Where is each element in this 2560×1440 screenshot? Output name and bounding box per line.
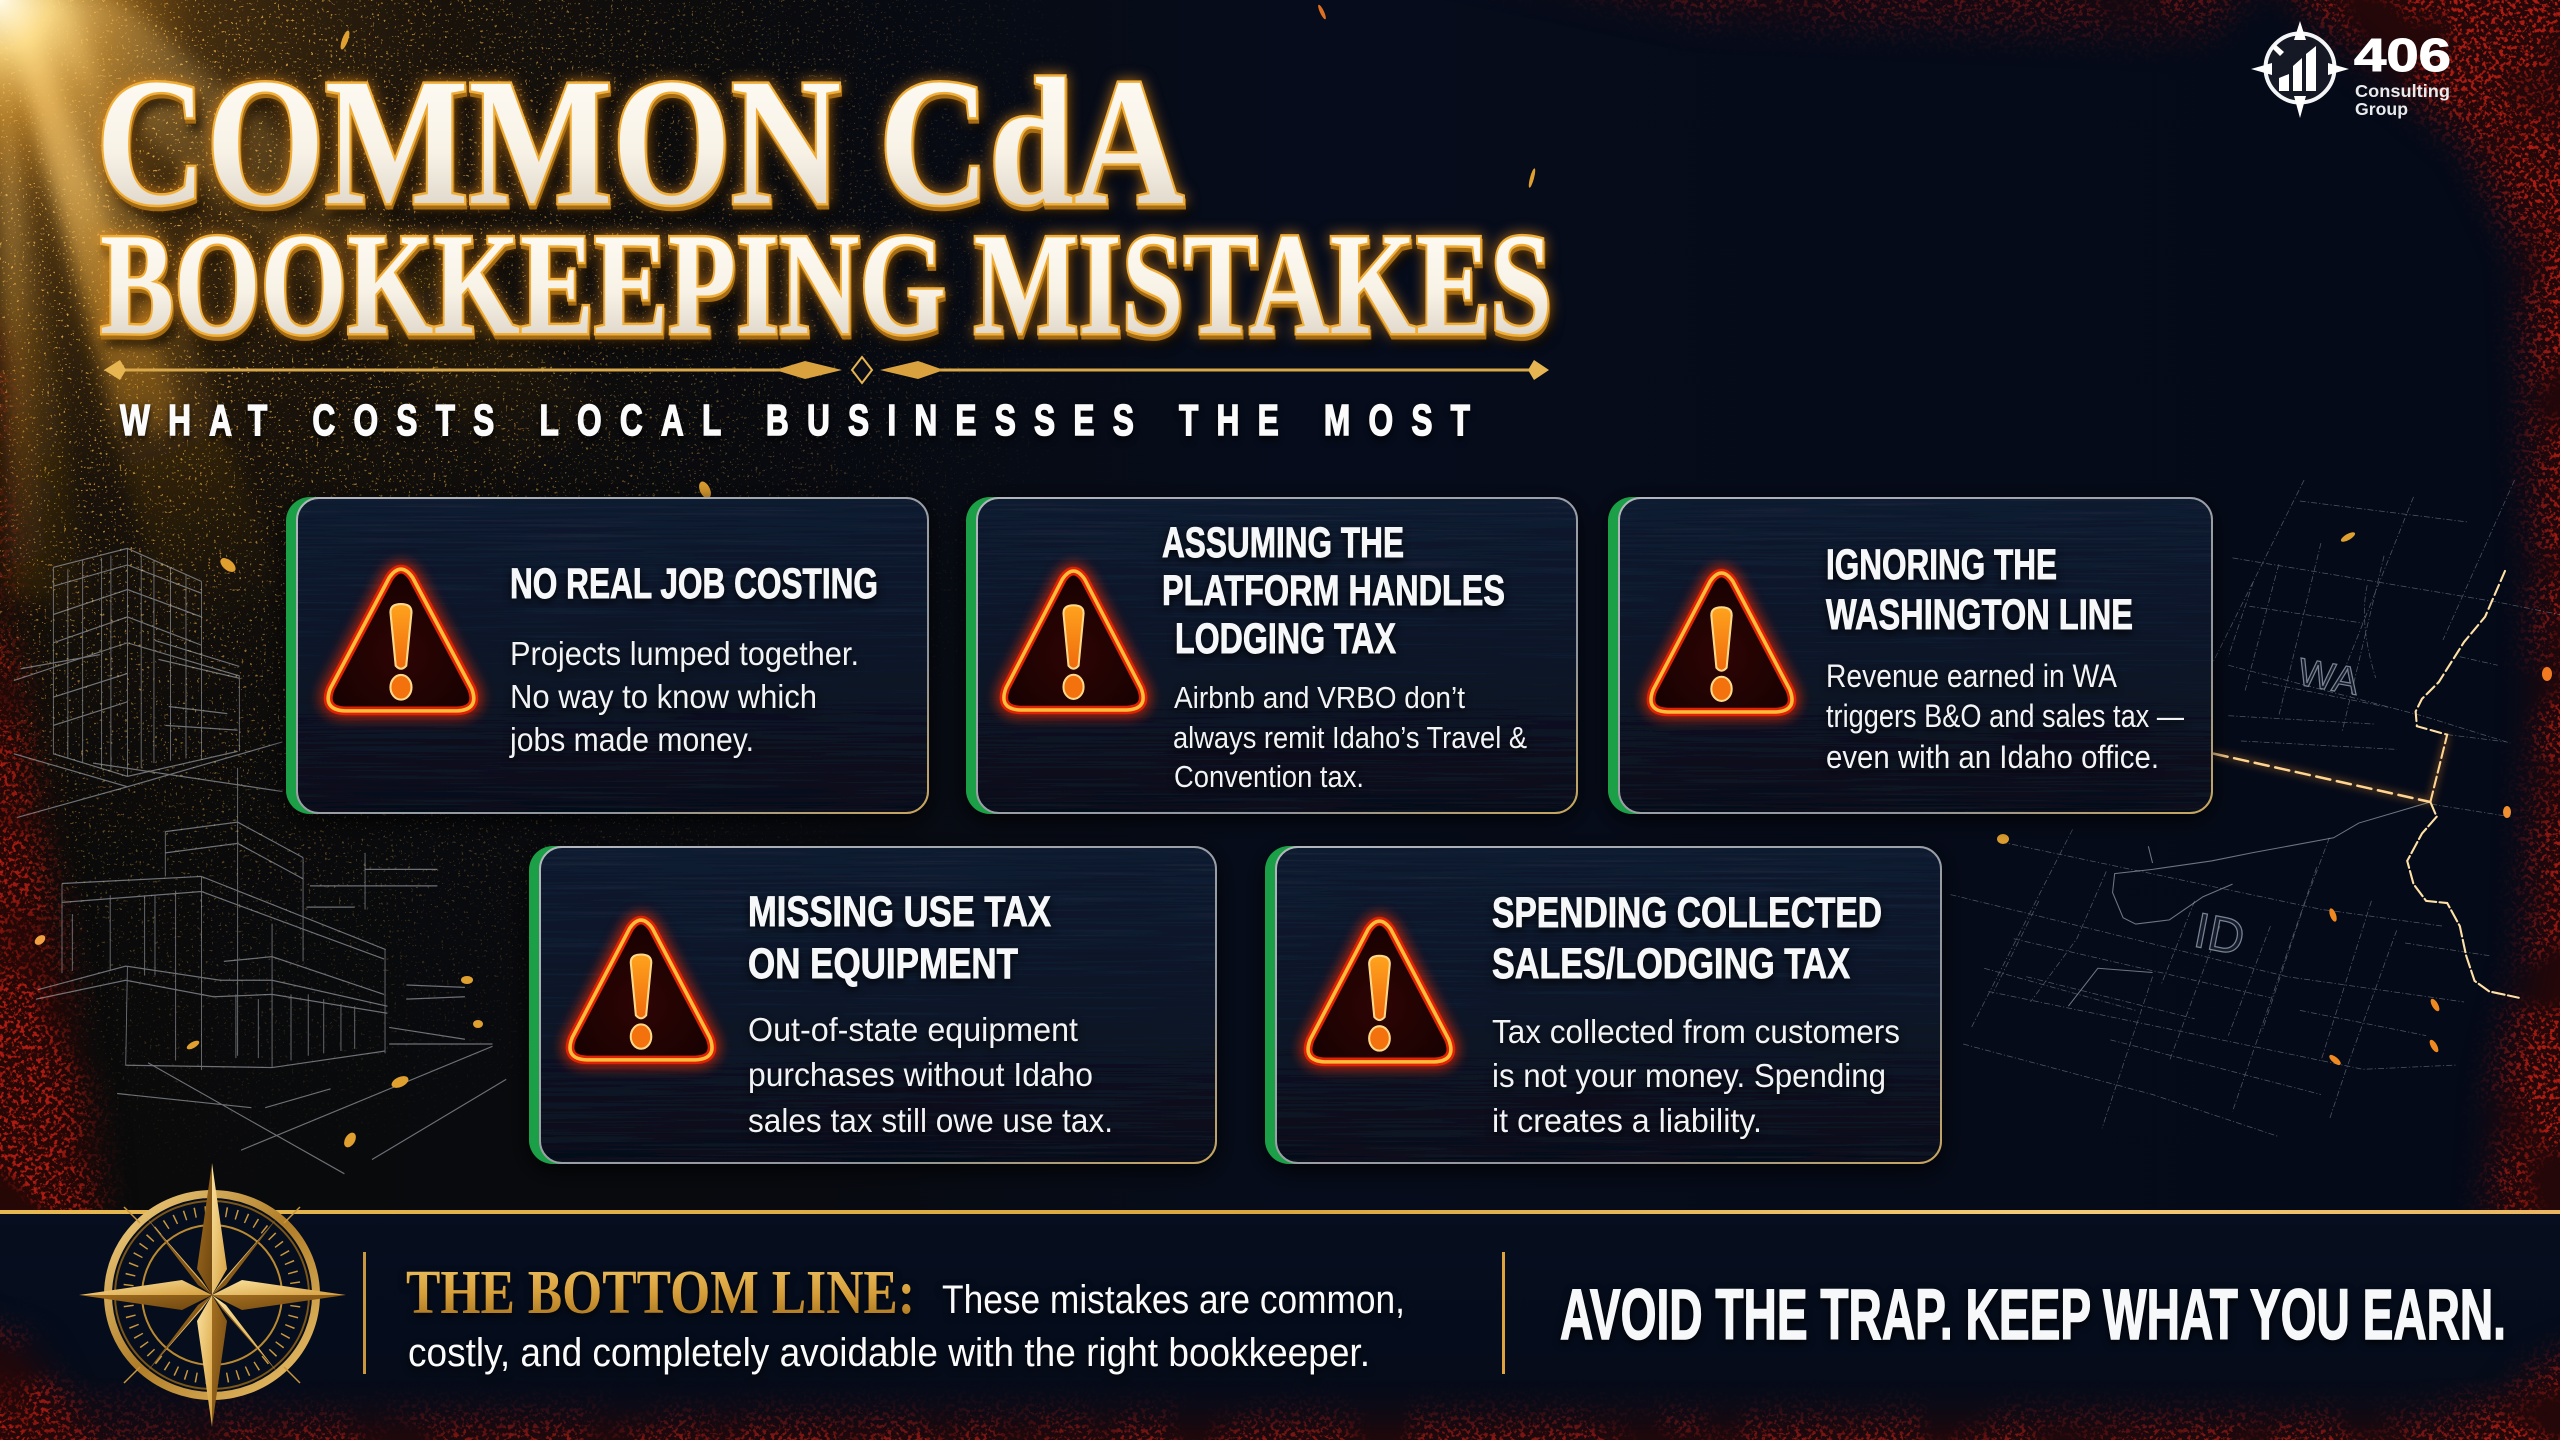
heading: SALES/LODGING TAX	[1492, 940, 1850, 988]
panel: assuming the platform handles lodging tax	[966, 497, 1577, 814]
icon: warning triangle	[328, 569, 474, 711]
description: No way to know which	[510, 678, 817, 715]
icon: compass with bar chart	[2251, 21, 2349, 118]
description	[1173, 680, 1527, 794]
logo: 406 Consulting Group	[2251, 21, 2451, 119]
heading	[748, 888, 1051, 988]
map grid lines	[1951, 480, 2560, 1137]
icon: warning triangle	[570, 920, 712, 1060]
description: Revenue earned in WA	[1826, 658, 2118, 694]
label: WA: WA	[2295, 651, 2362, 704]
card surface	[966, 497, 1577, 814]
label: ID: ID	[2190, 902, 2249, 966]
description: Projects lumped together.	[510, 635, 859, 672]
card surface	[286, 497, 928, 814]
description: is not your money. Spending	[1492, 1057, 1886, 1094]
heading: ASSUMING THE	[1162, 519, 1404, 567]
bottom line text one: These mistakes are common,	[942, 1278, 1405, 1322]
heading: PLATFORM HANDLES	[1162, 567, 1505, 615]
icon: warning triangle	[1004, 571, 1143, 710]
heading: NO REAL JOB COSTING	[510, 560, 878, 608]
panel: missing use tax on equipment	[529, 846, 1216, 1164]
title	[96, 42, 1552, 365]
bottom band fill	[0, 1212, 2560, 1440]
subtitle: WHAT COSTS LOCAL BUSINESSES THE MOST	[120, 396, 1470, 445]
description	[1492, 1013, 1900, 1139]
description: even with an Idaho office.	[1826, 739, 2159, 775]
heading: IGNORING THE	[1826, 541, 2057, 589]
heading: LODGING TAX	[1175, 615, 1396, 663]
card surface	[1608, 497, 2212, 814]
icon: warning triangle	[1308, 921, 1451, 1062]
bottom line text two: costly, and completely avoidable with the right bookkeeper.	[408, 1331, 1370, 1375]
heading	[1162, 519, 1505, 663]
rivers	[2068, 802, 2430, 1006]
map: Washington and Idaho	[1951, 480, 2560, 1137]
gold rule	[0, 1210, 2560, 1214]
heading	[1826, 541, 2133, 639]
heading: MISSING USE TAX	[748, 888, 1051, 936]
heading	[1492, 889, 1882, 988]
title line two: BOOKKEEPING MISTAKES	[100, 203, 1552, 365]
vertical divider left	[363, 1252, 366, 1374]
description: it creates a liability.	[1492, 1102, 1762, 1139]
panel: spending collected sales/lodging tax	[1265, 846, 1941, 1164]
vertical divider right	[1502, 1252, 1505, 1374]
title line one: COMMON CdA	[96, 42, 1184, 243]
background	[0, 0, 1066, 1210]
icon: gold compass rose	[79, 1163, 346, 1427]
description: always remit Idaho’s Travel &	[1173, 720, 1527, 755]
description	[1826, 658, 2184, 775]
description: Airbnb and VRBO don’t	[1174, 680, 1465, 715]
panel: bottom band	[0, 1163, 2560, 1427]
ornamental divider	[104, 357, 1549, 383]
brand subtitle line two: Group	[2355, 99, 2408, 119]
description: jobs made money.	[509, 721, 754, 758]
brand name: 406	[2354, 29, 2451, 81]
panel: ignoring the washington line	[1608, 497, 2212, 814]
description: Convention tax.	[1174, 759, 1364, 794]
description: sales tax still owe use tax.	[748, 1102, 1113, 1139]
heading: WASHINGTON LINE	[1826, 591, 2133, 639]
description: Tax collected from customers	[1492, 1013, 1900, 1050]
brand subtitle line one: Consulting	[2355, 81, 2450, 101]
border glow	[2214, 735, 2447, 802]
description: Out-of-state equipment	[748, 1011, 1078, 1048]
description: triggers B&O and sales tax —	[1826, 698, 2184, 734]
heading: ON EQUIPMENT	[748, 940, 1018, 988]
heading: SPENDING COLLECTED	[1492, 889, 1882, 937]
description	[509, 635, 859, 758]
icon: warning triangle	[1651, 573, 1792, 712]
card surface	[529, 846, 1216, 1164]
blueprint building sketch	[14, 548, 506, 1174]
bottom line heading: THE BOTTOM LINE:	[406, 1259, 915, 1327]
description	[748, 1011, 1113, 1139]
panel: no real job costing	[286, 497, 928, 814]
state border dashed line	[2214, 568, 2519, 998]
card surface	[1265, 846, 1941, 1164]
description: purchases without Idaho	[748, 1056, 1093, 1093]
